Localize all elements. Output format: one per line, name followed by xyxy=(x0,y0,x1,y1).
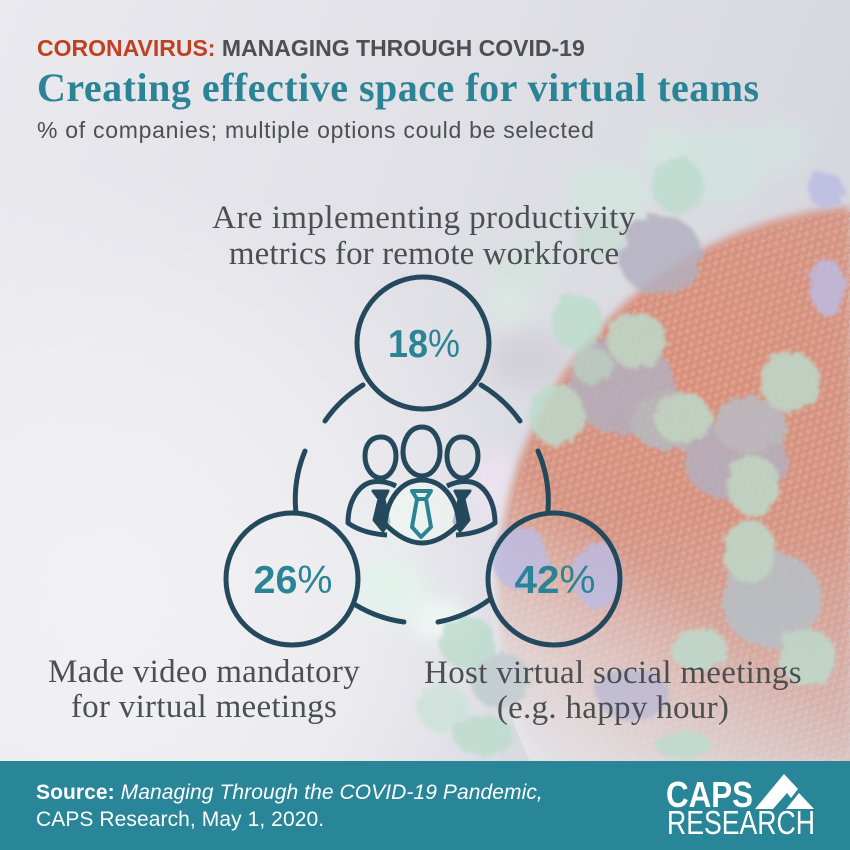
heading eyebrow: CORONAVIRUS: MANAGING THROUGH COVID-19 xyxy=(37,35,585,61)
footer band xyxy=(0,761,850,850)
label: video mandatory: for virtual meetings xyxy=(71,689,337,725)
circle: 18% xyxy=(357,277,489,409)
right person xyxy=(447,437,495,535)
connecting arcs xyxy=(295,385,548,622)
center person xyxy=(385,427,459,543)
label: productivity metrics: metrics for remote workforce xyxy=(229,236,619,272)
spike stems xyxy=(470,215,822,721)
circle: 26%: 26% xyxy=(254,559,332,602)
source text: CAPS Research, May 1, 2020. xyxy=(36,808,324,831)
label: virtual social meetings: Host virtual social meetings xyxy=(424,655,802,691)
label: video mandatory xyxy=(48,654,360,725)
label: productivity metrics xyxy=(212,200,636,272)
label: productivity metrics: Are implementing productivity xyxy=(212,200,636,236)
label: virtual social meetings xyxy=(424,655,802,726)
circle: 26% xyxy=(226,513,358,645)
subtitle: % of companies; multiple options could be selected xyxy=(37,117,595,143)
source text xyxy=(36,781,543,831)
circle: 42%: 42% xyxy=(514,559,596,602)
source text: Source: Managing Through the COVID-19 Pandemic, xyxy=(36,781,543,804)
logo: CAPS Research xyxy=(666,774,815,841)
label: video mandatory: Made video mandatory xyxy=(48,654,360,690)
logo: CAPS Research: CAPS xyxy=(666,774,753,815)
left person xyxy=(348,437,396,535)
lilac spikes xyxy=(492,172,846,609)
circle: 42% xyxy=(488,513,620,645)
title: Creating effective space for virtual teams xyxy=(37,65,760,110)
icon: team of three people xyxy=(348,427,495,543)
tie xyxy=(412,491,431,537)
circle: 18%: 18% xyxy=(388,323,460,366)
label: virtual social meetings: (e.g. happy hour) xyxy=(497,690,729,726)
spike heads xyxy=(417,157,835,759)
logo: CAPS Research: RESEARCH xyxy=(667,804,815,841)
